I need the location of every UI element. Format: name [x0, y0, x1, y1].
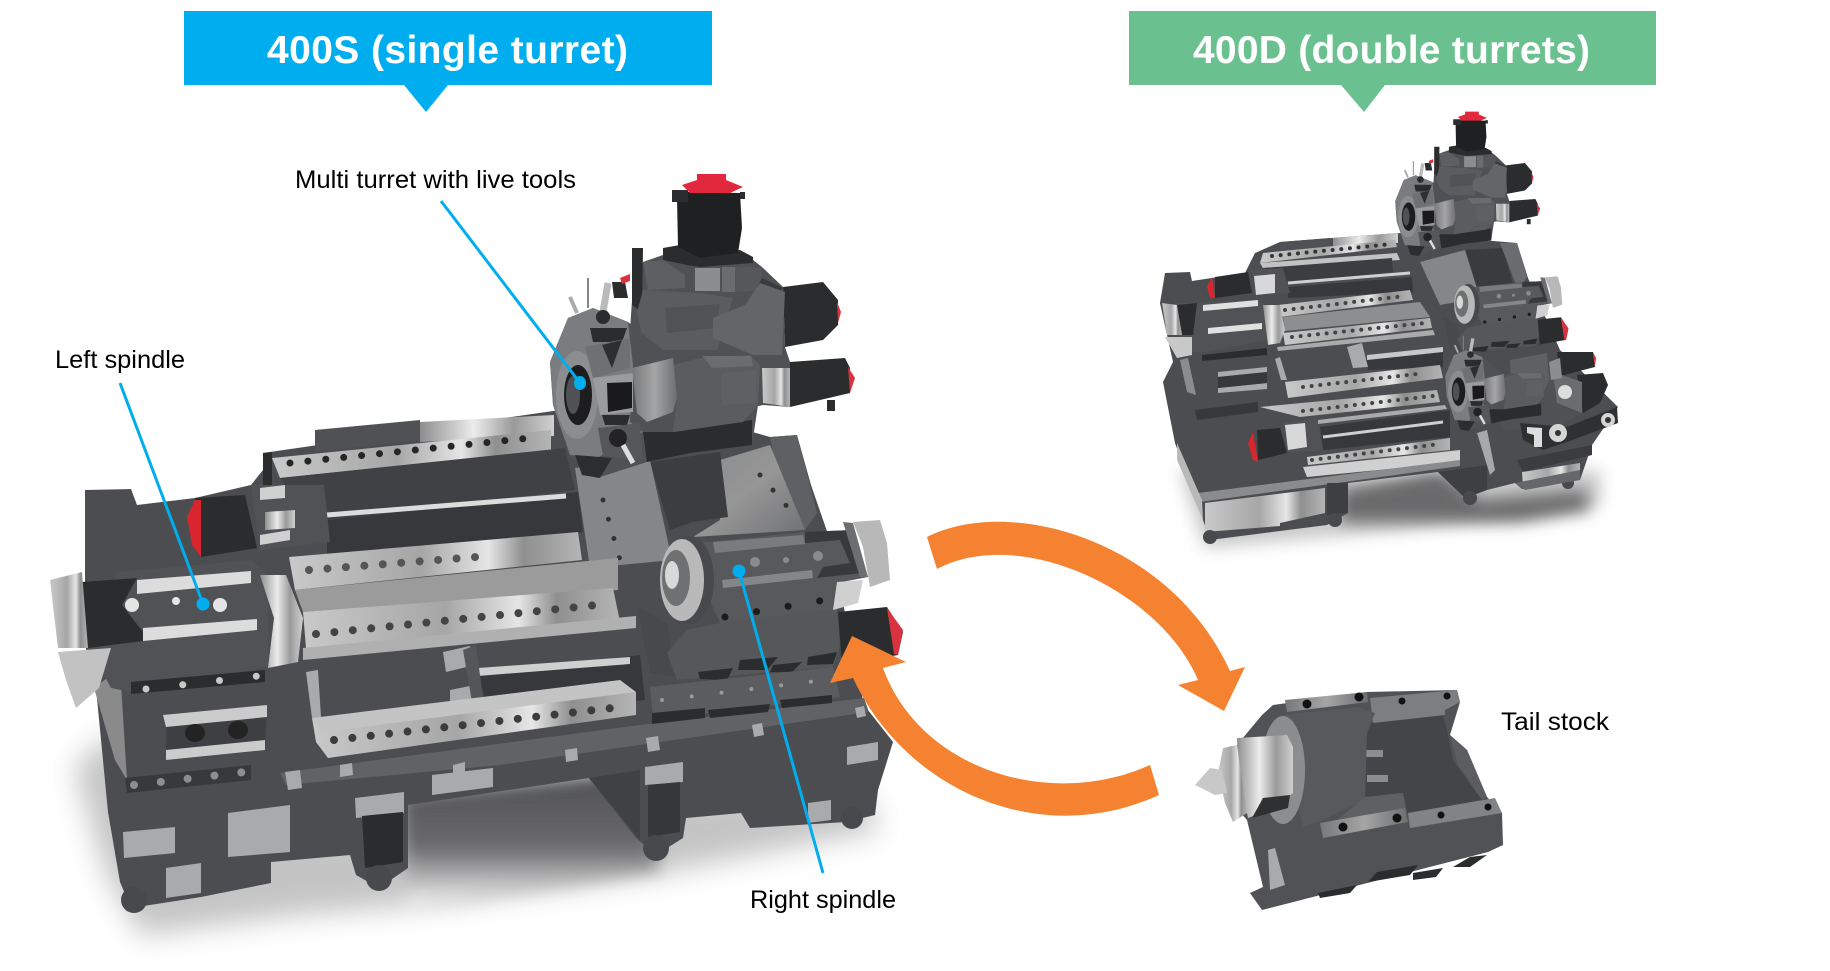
machine bed — [85, 400, 893, 908]
front rail — [312, 680, 636, 758]
slide plates — [575, 435, 817, 568]
label: left spindle: Left spindle — [55, 346, 185, 374]
barrel — [1280, 707, 1407, 827]
under-bed shadow — [400, 770, 660, 910]
label: tail stock: Tail stock — [1501, 708, 1610, 736]
400D upper turret — [1395, 112, 1540, 256]
lower clamp — [125, 705, 267, 793]
arrow: to tail stock — [927, 522, 1245, 711]
400D slide — [1420, 243, 1527, 305]
turret assembly — [550, 174, 855, 478]
ball screw — [327, 492, 583, 557]
400D under-bed shadow — [1340, 470, 1590, 522]
label: multi turret: Multi turret with live tools — [295, 166, 576, 194]
tailstock base plate — [650, 667, 840, 724]
400D shadow — [1180, 470, 1600, 548]
lower guide plates — [1320, 798, 1502, 838]
tail stock hollow — [1365, 715, 1482, 813]
rear rail — [263, 415, 575, 520]
guide pins — [1365, 750, 1388, 782]
tailstock motor — [187, 485, 330, 557]
guide plates — [1285, 690, 1460, 723]
ring — [1261, 716, 1305, 824]
leader line: multi turret — [441, 201, 586, 390]
ledge — [280, 698, 869, 790]
400D upper right spindle — [1443, 276, 1568, 352]
400D left spindle — [1162, 300, 1285, 420]
panel: 400S machine — [50, 174, 903, 935]
400D gear plate — [1520, 407, 1618, 450]
400D bed — [1160, 233, 1618, 540]
ground shadow — [75, 740, 880, 935]
right spindle — [637, 520, 903, 724]
400D tail motors — [1207, 268, 1323, 462]
tail stock silhouette — [1237, 690, 1503, 910]
base slots — [1268, 848, 1487, 898]
banner: 400S: 400S (single turret) — [267, 29, 628, 72]
banner: 400D: 400D (double turrets) — [1193, 29, 1590, 72]
400D lower turret — [1445, 336, 1608, 490]
400D base panels — [1177, 443, 1574, 544]
400D rails — [1260, 233, 1460, 477]
banner: 400D — [1129, 11, 1656, 112]
panel: tail stock — [1195, 690, 1503, 910]
leader line: left spindle — [120, 383, 210, 610]
base plates — [121, 742, 878, 913]
label: right spindle: Right spindle — [750, 886, 896, 914]
panel: 400D machine — [1160, 112, 1618, 548]
left spindle — [50, 560, 303, 780]
banner: 400S — [184, 11, 712, 112]
leader line: right spindle — [732, 564, 823, 873]
middle rails — [289, 532, 636, 660]
lead screw and bracket — [306, 645, 645, 718]
live centre nose — [1195, 735, 1293, 822]
arrow: to right spindle — [830, 636, 1159, 816]
